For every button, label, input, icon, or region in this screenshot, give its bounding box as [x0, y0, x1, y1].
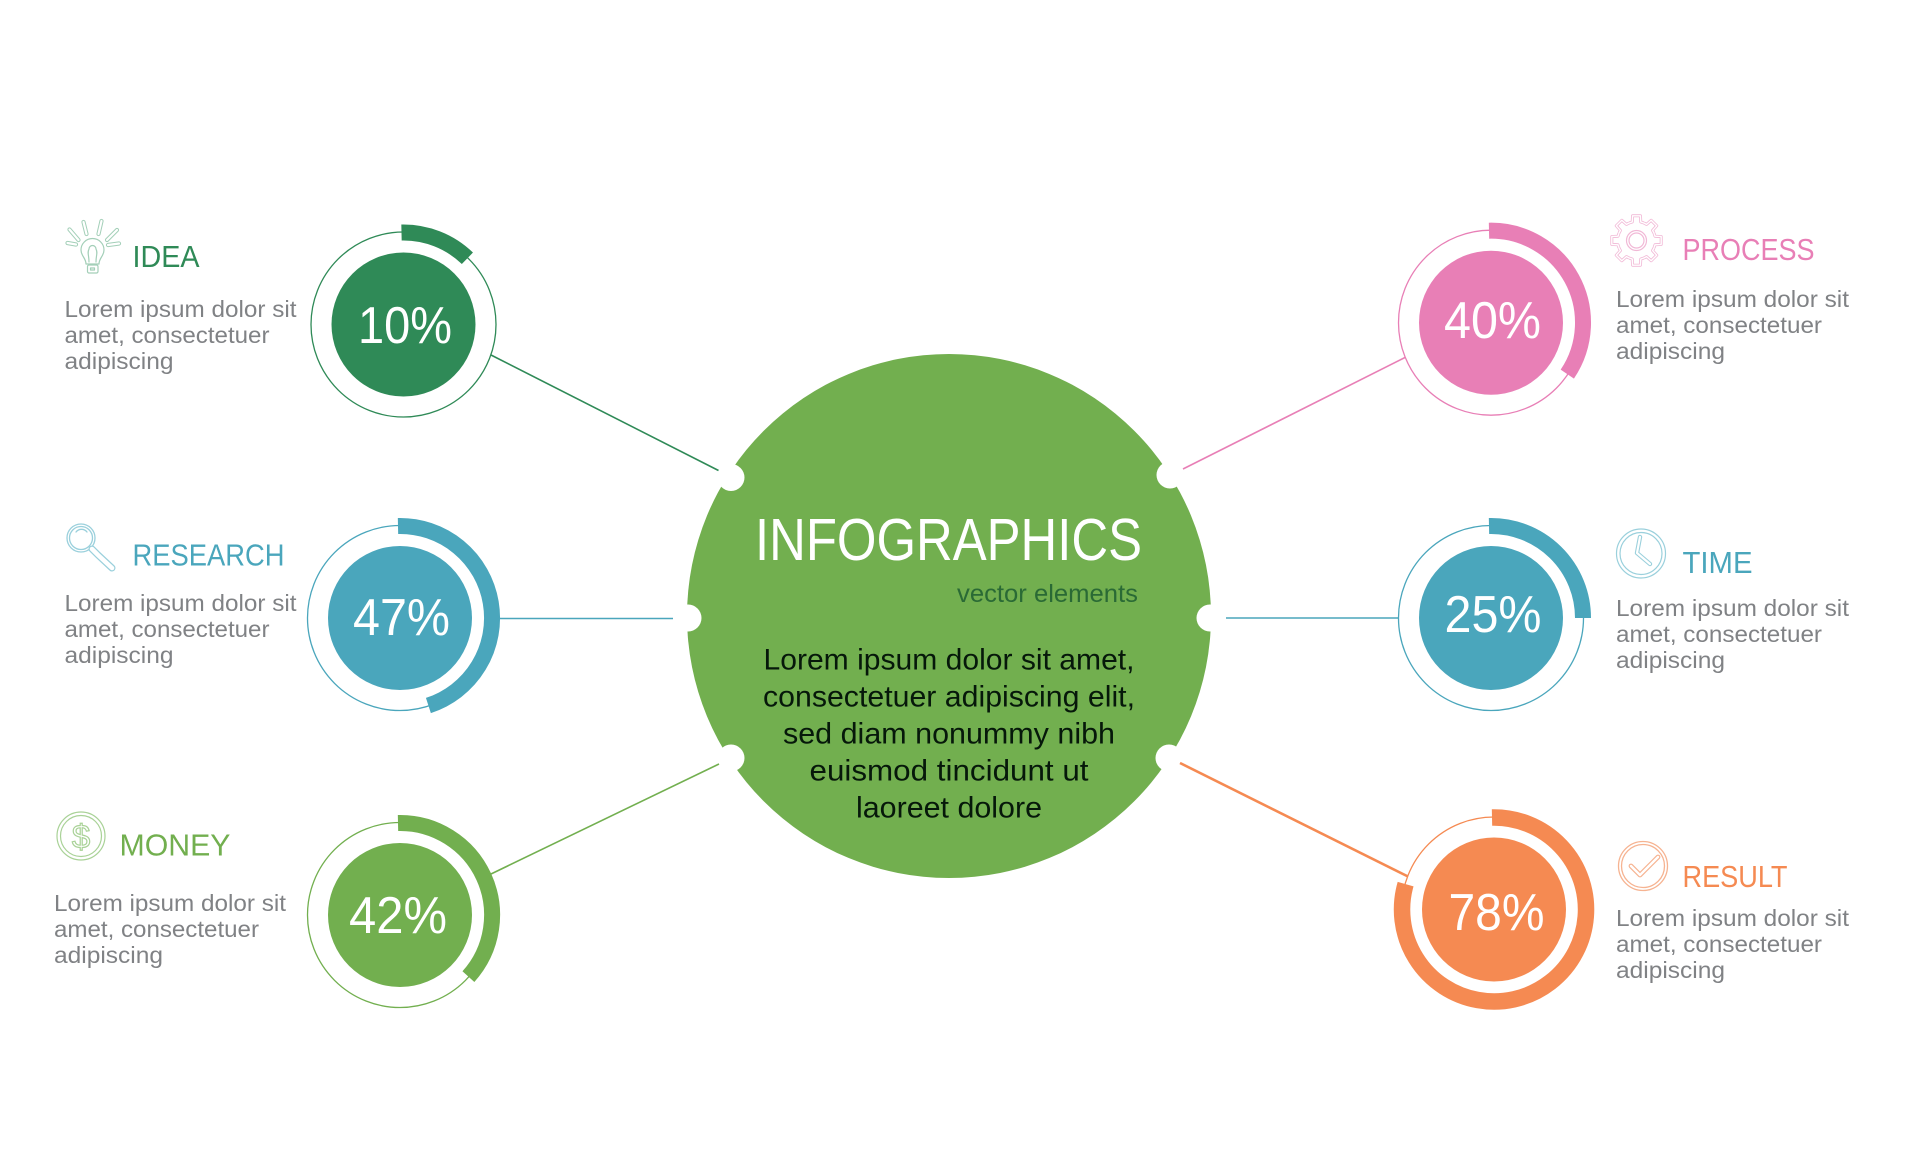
center body text: consectetuer adipiscing elit,	[763, 680, 1135, 714]
icon: light bulb	[68, 221, 119, 273]
donut chart: 40%	[1398, 230, 1584, 415]
connector notches	[674, 462, 1224, 772]
description	[64, 296, 297, 374]
description: Lorem ipsum dolor sit	[1616, 595, 1849, 621]
description: Lorem ipsum dolor sit	[64, 590, 297, 616]
description: Lorem ipsum dolor sit	[1616, 286, 1849, 312]
icon: check mark	[1618, 842, 1668, 890]
panel: money	[54, 764, 719, 1008]
title: INFOGRAPHICS	[755, 507, 1142, 573]
donut chart: 10%	[311, 232, 496, 417]
center body text: laoreet dolore	[856, 792, 1042, 824]
description: Lorem ipsum dolor sit	[1616, 905, 1849, 931]
panel: research	[64, 524, 673, 710]
connector line	[1183, 357, 1406, 469]
description: amet, consectetuer	[64, 322, 270, 348]
icon: clock	[1616, 529, 1666, 578]
panel: center hub	[674, 354, 1224, 878]
donut chart: 47%	[308, 526, 492, 710]
description: amet, consectetuer	[1616, 621, 1822, 647]
description: adipiscing	[1616, 957, 1725, 983]
description: adipiscing	[1616, 338, 1725, 364]
center body text: euismod tincidunt ut	[810, 754, 1088, 788]
icon: dollar coin	[57, 812, 105, 860]
center body text: sed diam nonummy nibh	[783, 718, 1115, 750]
description	[1616, 286, 1849, 364]
description: amet, consectetuer	[1616, 931, 1822, 957]
heading: PROCESS	[1682, 232, 1814, 267]
connector line	[491, 764, 719, 874]
connector line	[491, 355, 718, 470]
description: adipiscing	[54, 942, 163, 968]
description	[1616, 595, 1849, 673]
heading: IDEA	[132, 239, 200, 274]
description: adipiscing	[64, 642, 174, 668]
donut chart: 42%	[308, 822, 492, 1008]
subtitle: vector elements	[957, 580, 1138, 608]
heading: MONEY	[120, 828, 230, 862]
description: amet, consectetuer	[1616, 312, 1822, 338]
connector line	[1180, 763, 1409, 877]
panel: idea	[64, 221, 718, 470]
donut chart: 40%: 40%	[1444, 292, 1541, 350]
center circle	[687, 354, 1211, 878]
connector line	[1226, 617, 1398, 619]
description	[1616, 905, 1849, 983]
icon: magnifier	[67, 524, 112, 568]
panel: result	[1180, 763, 1849, 1002]
heading: RESEARCH	[132, 538, 284, 572]
panel: time	[1226, 526, 1849, 710]
donut chart: 42%: 42%	[349, 887, 447, 945]
description	[54, 890, 286, 968]
description: amet, consectetuer	[64, 616, 270, 642]
description: Lorem ipsum dolor sit	[54, 890, 286, 916]
donut chart: 78%: 78%	[1448, 884, 1544, 942]
connector line	[500, 618, 673, 620]
description: Lorem ipsum dolor sit	[64, 296, 297, 322]
center body text: Lorem ipsum dolor sit amet,	[764, 644, 1134, 676]
center body text	[763, 644, 1135, 824]
heading: RESULT	[1682, 859, 1788, 894]
description: adipiscing	[1616, 647, 1725, 673]
donut chart: 10%: 10%	[358, 297, 452, 355]
donut chart: 25%	[1398, 526, 1584, 710]
donut chart: 47%: 47%	[353, 589, 450, 647]
icon: dollar coin: $	[72, 818, 90, 855]
panel: process	[1183, 216, 1849, 469]
icon: gear	[1612, 216, 1661, 265]
description: adipiscing	[64, 348, 174, 374]
donut chart: 78%	[1402, 817, 1586, 1002]
heading: TIME	[1682, 545, 1752, 580]
description	[64, 590, 297, 668]
description: amet, consectetuer	[54, 916, 259, 942]
donut chart: 25%: 25%	[1444, 586, 1542, 644]
